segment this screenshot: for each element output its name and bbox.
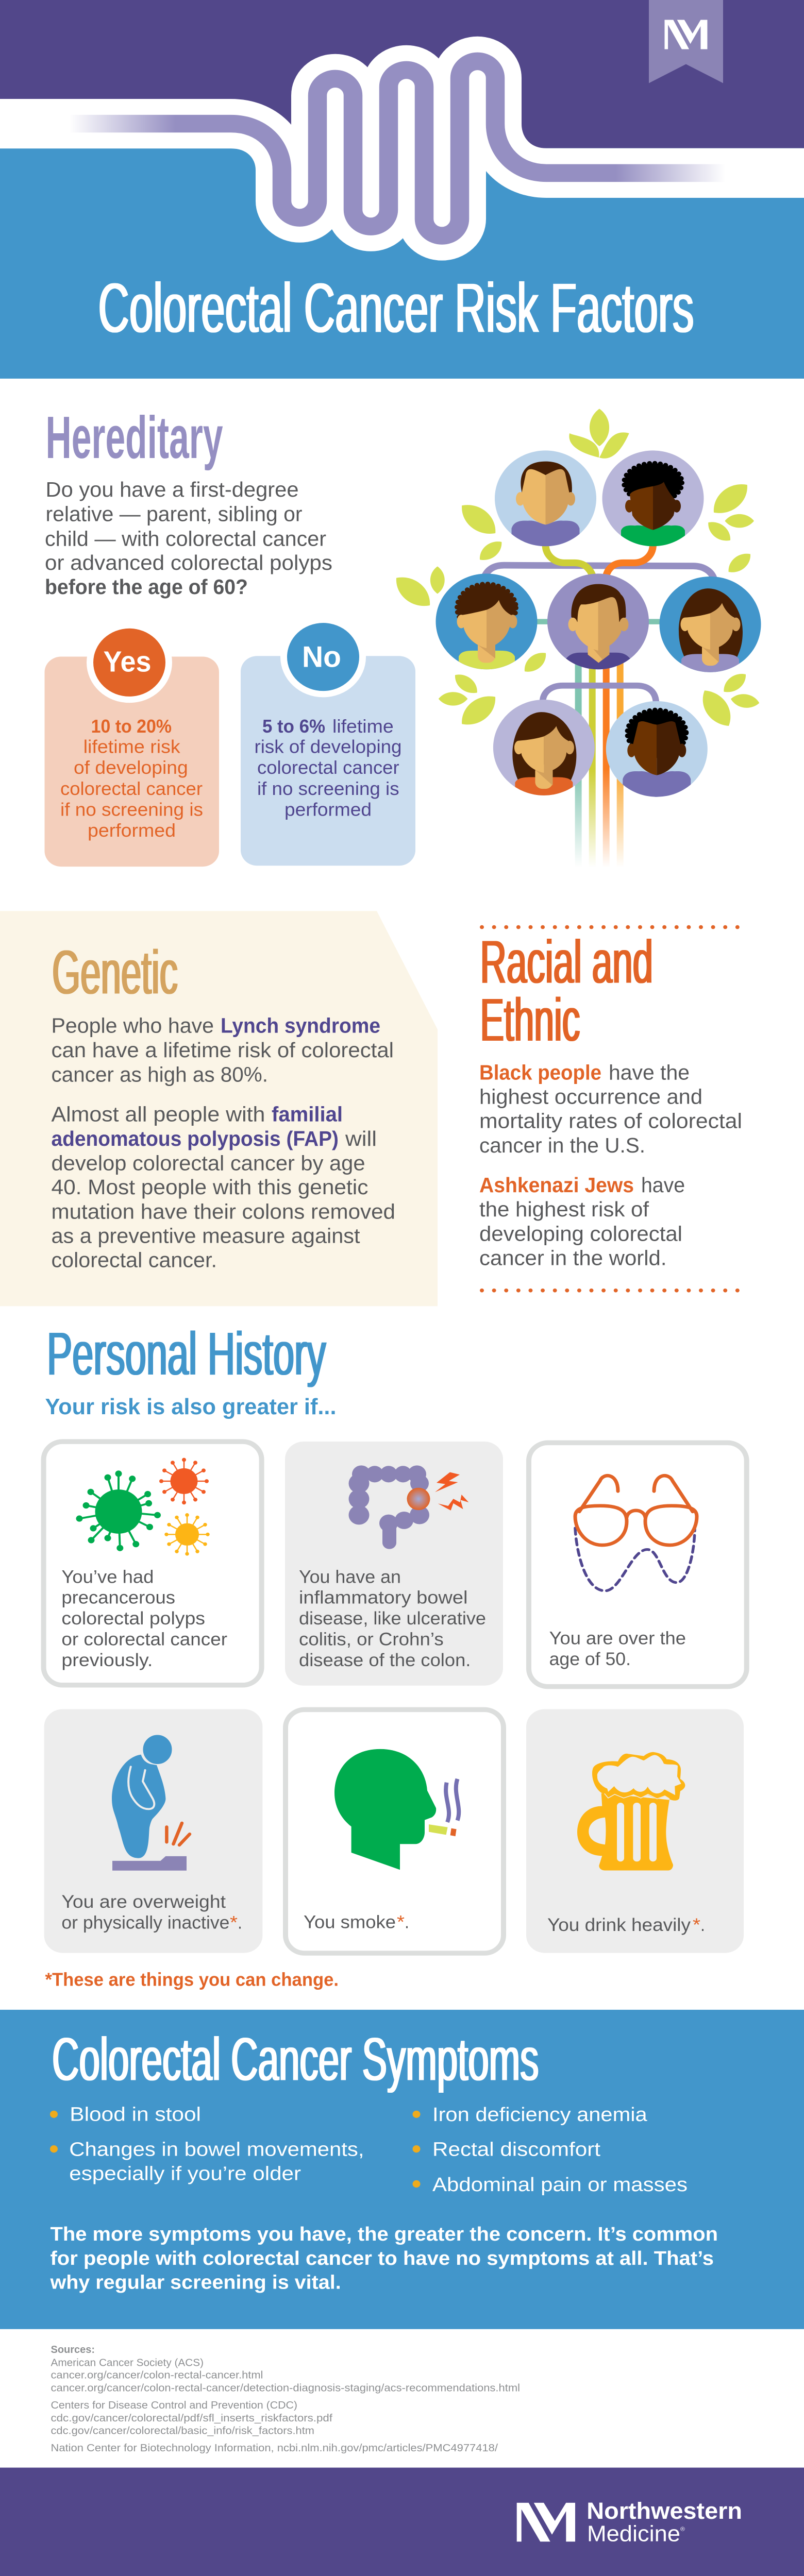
text block: hereditary question: child — with colorectal cancer <box>45 527 326 550</box>
person: top left <box>495 450 596 547</box>
list: symptoms: Abdominal pain or masses <box>432 2174 688 2196</box>
text: overweight: . <box>238 1912 242 1933</box>
text block: no risk: lifetime <box>332 716 394 737</box>
list: symptoms <box>50 2104 688 2196</box>
heading: racial and ethnic: Racial and <box>480 928 653 996</box>
text block: genetic: People who have <box>52 1014 214 1037</box>
person: top right <box>602 450 704 547</box>
person: bottom right <box>606 701 708 798</box>
logo: Northwestern Medicine: Medicine <box>587 2522 680 2546</box>
sources: American Cancer Society (ACS) <box>51 2357 204 2368</box>
text block: hereditary question: before the age of 60? <box>45 575 248 599</box>
text block: racial and ethnic: have <box>641 1173 685 1197</box>
text block: racial and ethnic: highest occurrence and <box>479 1085 702 1108</box>
sources <box>51 2344 520 2454</box>
icon: no badge <box>280 617 366 697</box>
panel: symptoms <box>0 2010 804 2329</box>
text block: genetic: colorectal cancer. <box>52 1248 217 1272</box>
icon: overweight person <box>112 1735 190 1871</box>
panel: polyps card <box>44 1442 262 1685</box>
text block: genetic: Lynch syndrome <box>221 1014 380 1037</box>
sources: Sources: <box>51 2344 95 2355</box>
text: bowel disease: colitis, or Crohn’s <box>299 1629 444 1649</box>
text block: yes risk: lifetime risk <box>83 736 180 757</box>
text block: genetic: as a preventive measure against <box>52 1224 360 1247</box>
text: smoke: . <box>405 1911 409 1932</box>
panel: no <box>241 617 415 866</box>
icon: colon illustration <box>0 61 804 236</box>
text block: racial and ethnic: cancer in the U.S. <box>479 1133 645 1157</box>
text block: symptoms summary: The more symptoms you have, the greater the concern. It’s common <box>51 2224 718 2245</box>
text block: symptoms summary: for people with colorectal cancer to have no symptoms at all. That’s <box>51 2248 714 2269</box>
text: polyps <box>61 1566 227 1670</box>
text: polyps: You’ve had <box>61 1566 154 1587</box>
text: drink: . <box>700 1914 705 1935</box>
sources: cdc.gov/cancer/colorectal/pdf/sfl_inserts_riskfactors.pdf <box>51 2412 332 2424</box>
icon: beer mug <box>577 1752 685 1870</box>
icon: bookmark logo <box>649 0 723 83</box>
text block: hereditary question: relative — parent, sibling or <box>45 502 303 526</box>
heading: hereditary: Hereditary <box>45 404 223 471</box>
text block: yes risk: performed <box>88 820 176 841</box>
text: overweight <box>61 1891 242 1933</box>
panel: age card <box>529 1443 747 1687</box>
text block: genetic: cancer as high as 80%. <box>52 1063 268 1086</box>
panel: genetic <box>0 911 438 1306</box>
text: overweight: You are overweight <box>61 1891 226 1912</box>
icon: glasses <box>575 1476 697 1591</box>
text: bowel disease <box>299 1566 486 1670</box>
sources: Nation Center for Biotechnology Information, ncbi.nlm.nih.gov/pmc/articles/PMC4977418/ <box>51 2442 498 2454</box>
text block: genetic: will <box>345 1127 377 1150</box>
text block: yes risk: colorectal cancer <box>60 778 203 799</box>
text block: no risk: 5 to 6% <box>262 716 325 737</box>
text block: genetic: Almost all people with <box>52 1103 265 1126</box>
list: symptoms: Blood in stool <box>70 2104 201 2125</box>
sources: cancer.org/cancer/colon-rectal-cancer.html <box>51 2369 263 2381</box>
text block: racial and ethnic: Ashkenazi Jews <box>479 1173 634 1197</box>
list: symptoms: especially if you’re older <box>69 2163 301 2184</box>
person: middle right <box>660 577 761 673</box>
text: smoke: * <box>397 1911 405 1932</box>
text block: racial and ethnic: have the <box>609 1060 690 1084</box>
icon: smoker head <box>334 1749 459 1870</box>
text: overweight: * <box>230 1912 238 1933</box>
sources: cancer.org/cancer/colon-rectal-cancer/detection-diagnosis-staging/acs-recommendations.html <box>51 2382 520 2394</box>
text block: genetic: develop colorectal cancer by age <box>52 1151 365 1175</box>
text: overweight: or physically inactive <box>61 1912 229 1933</box>
subheading: your risk: Your risk is also greater if... <box>45 1395 337 1419</box>
icon: no badge: No <box>302 640 341 673</box>
text block: genetic <box>52 1014 395 1272</box>
heading: genetic: Genetic <box>52 938 178 1007</box>
text: polyps: or colorectal cancer <box>61 1629 227 1649</box>
text: polyps: previously. <box>61 1650 153 1670</box>
text: polyps: colorectal polyps <box>61 1608 205 1629</box>
text block: no risk: colorectal cancer <box>257 757 399 778</box>
icon: yes badge: Yes <box>103 646 151 678</box>
text: age: You are over the <box>549 1628 686 1648</box>
text block: genetic: familial <box>272 1103 343 1126</box>
text block: genetic: mutation have their colons removed <box>52 1200 395 1223</box>
leaves <box>389 409 760 732</box>
panel: yes <box>44 622 219 867</box>
family tree illustration <box>389 409 761 868</box>
text block: racial and ethnic: Black people <box>479 1060 601 1084</box>
text block: yes risk: of developing <box>74 757 188 778</box>
text block: genetic: 40. Most people with this genetic <box>52 1175 368 1199</box>
text: drink: You drink heavily <box>547 1914 691 1935</box>
footer <box>0 2468 804 2576</box>
text block: symptoms summary: why regular screening is vital. <box>49 2272 341 2293</box>
text block: no risk: if no screening is <box>257 778 399 799</box>
text: bowel disease: disease of the colon. <box>299 1650 471 1670</box>
list: symptoms: Rectal discomfort <box>432 2139 600 2160</box>
text block: hereditary question <box>45 478 332 599</box>
text: age <box>549 1628 686 1669</box>
text: polyps: precancerous <box>61 1587 175 1607</box>
connectors <box>484 545 714 868</box>
text: bowel disease: disease, like ulcerative <box>299 1608 486 1629</box>
list: symptoms: Changes in bowel movements, <box>69 2139 364 2160</box>
text: smoke: You smoke <box>304 1911 396 1932</box>
text block: no risk: performed <box>284 800 372 820</box>
text block: no risk: risk of developing <box>255 736 402 757</box>
text block: yes risk <box>60 716 203 841</box>
icon: viruses <box>79 1460 208 1554</box>
text block: racial and ethnic: mortality rates of colorectal <box>479 1109 742 1132</box>
text: age: age of 50. <box>549 1649 631 1669</box>
logo: Northwestern Medicine: Northwestern <box>587 2498 742 2524</box>
text block: yes risk: 10 to 20% <box>91 716 172 737</box>
list: symptoms: Iron deficiency anemia <box>432 2104 647 2126</box>
person: bottom left <box>493 700 595 796</box>
text: drink: * <box>693 1914 700 1935</box>
panel: bowel disease card <box>285 1442 503 1686</box>
logo: Northwestern Medicine: ® <box>680 2526 685 2532</box>
text block: racial and ethnic: developing colorectal <box>479 1222 682 1245</box>
panel: overweight card <box>44 1709 262 1953</box>
text block: yes risk: if no screening is <box>60 800 203 820</box>
person: center <box>547 573 649 670</box>
text block: genetic: adenomatous polyposis (FAP) <box>52 1127 339 1150</box>
person: middle left <box>436 573 537 670</box>
text block: hereditary question: or advanced colorectal polyps <box>45 551 332 574</box>
text block: hereditary question: Do you have a first-degree <box>45 478 299 501</box>
sources: Centers for Disease Control and Prevention (CDC) <box>51 2399 297 2411</box>
logo: Northwestern Medicine <box>517 2498 742 2546</box>
text: bowel disease: You have an <box>299 1566 401 1587</box>
icon: colon with inflammation <box>348 1465 468 1549</box>
text block: genetic: can have a lifetime risk of colorectal <box>52 1038 394 1062</box>
sources: cdc.gov/cancer/colorectal/basic_info/risk_factors.htm <box>51 2425 314 2436</box>
text block: racial and ethnic <box>479 1060 742 1269</box>
text: bowel disease: inflammatory bowel <box>299 1587 468 1607</box>
heading: racial and ethnic <box>480 928 653 1054</box>
text block: symptoms summary <box>49 2224 718 2293</box>
text block: racial and ethnic: cancer in the world. <box>479 1246 667 1269</box>
panel: racial and ethnic <box>479 927 742 1291</box>
panel: smoking card <box>286 1709 504 1953</box>
heading: racial and ethnic: Ethnic <box>480 986 580 1054</box>
heading: personal history: Personal History <box>47 1319 326 1387</box>
footnote: *These are things you can change. <box>45 1970 339 1990</box>
text block: racial and ethnic: the highest risk of <box>479 1197 649 1221</box>
text block: no risk <box>255 716 402 820</box>
panel: drinking card <box>526 1709 744 1953</box>
panel: hereditary <box>44 404 415 867</box>
icon: yes badge <box>87 622 172 703</box>
header background <box>0 0 804 379</box>
